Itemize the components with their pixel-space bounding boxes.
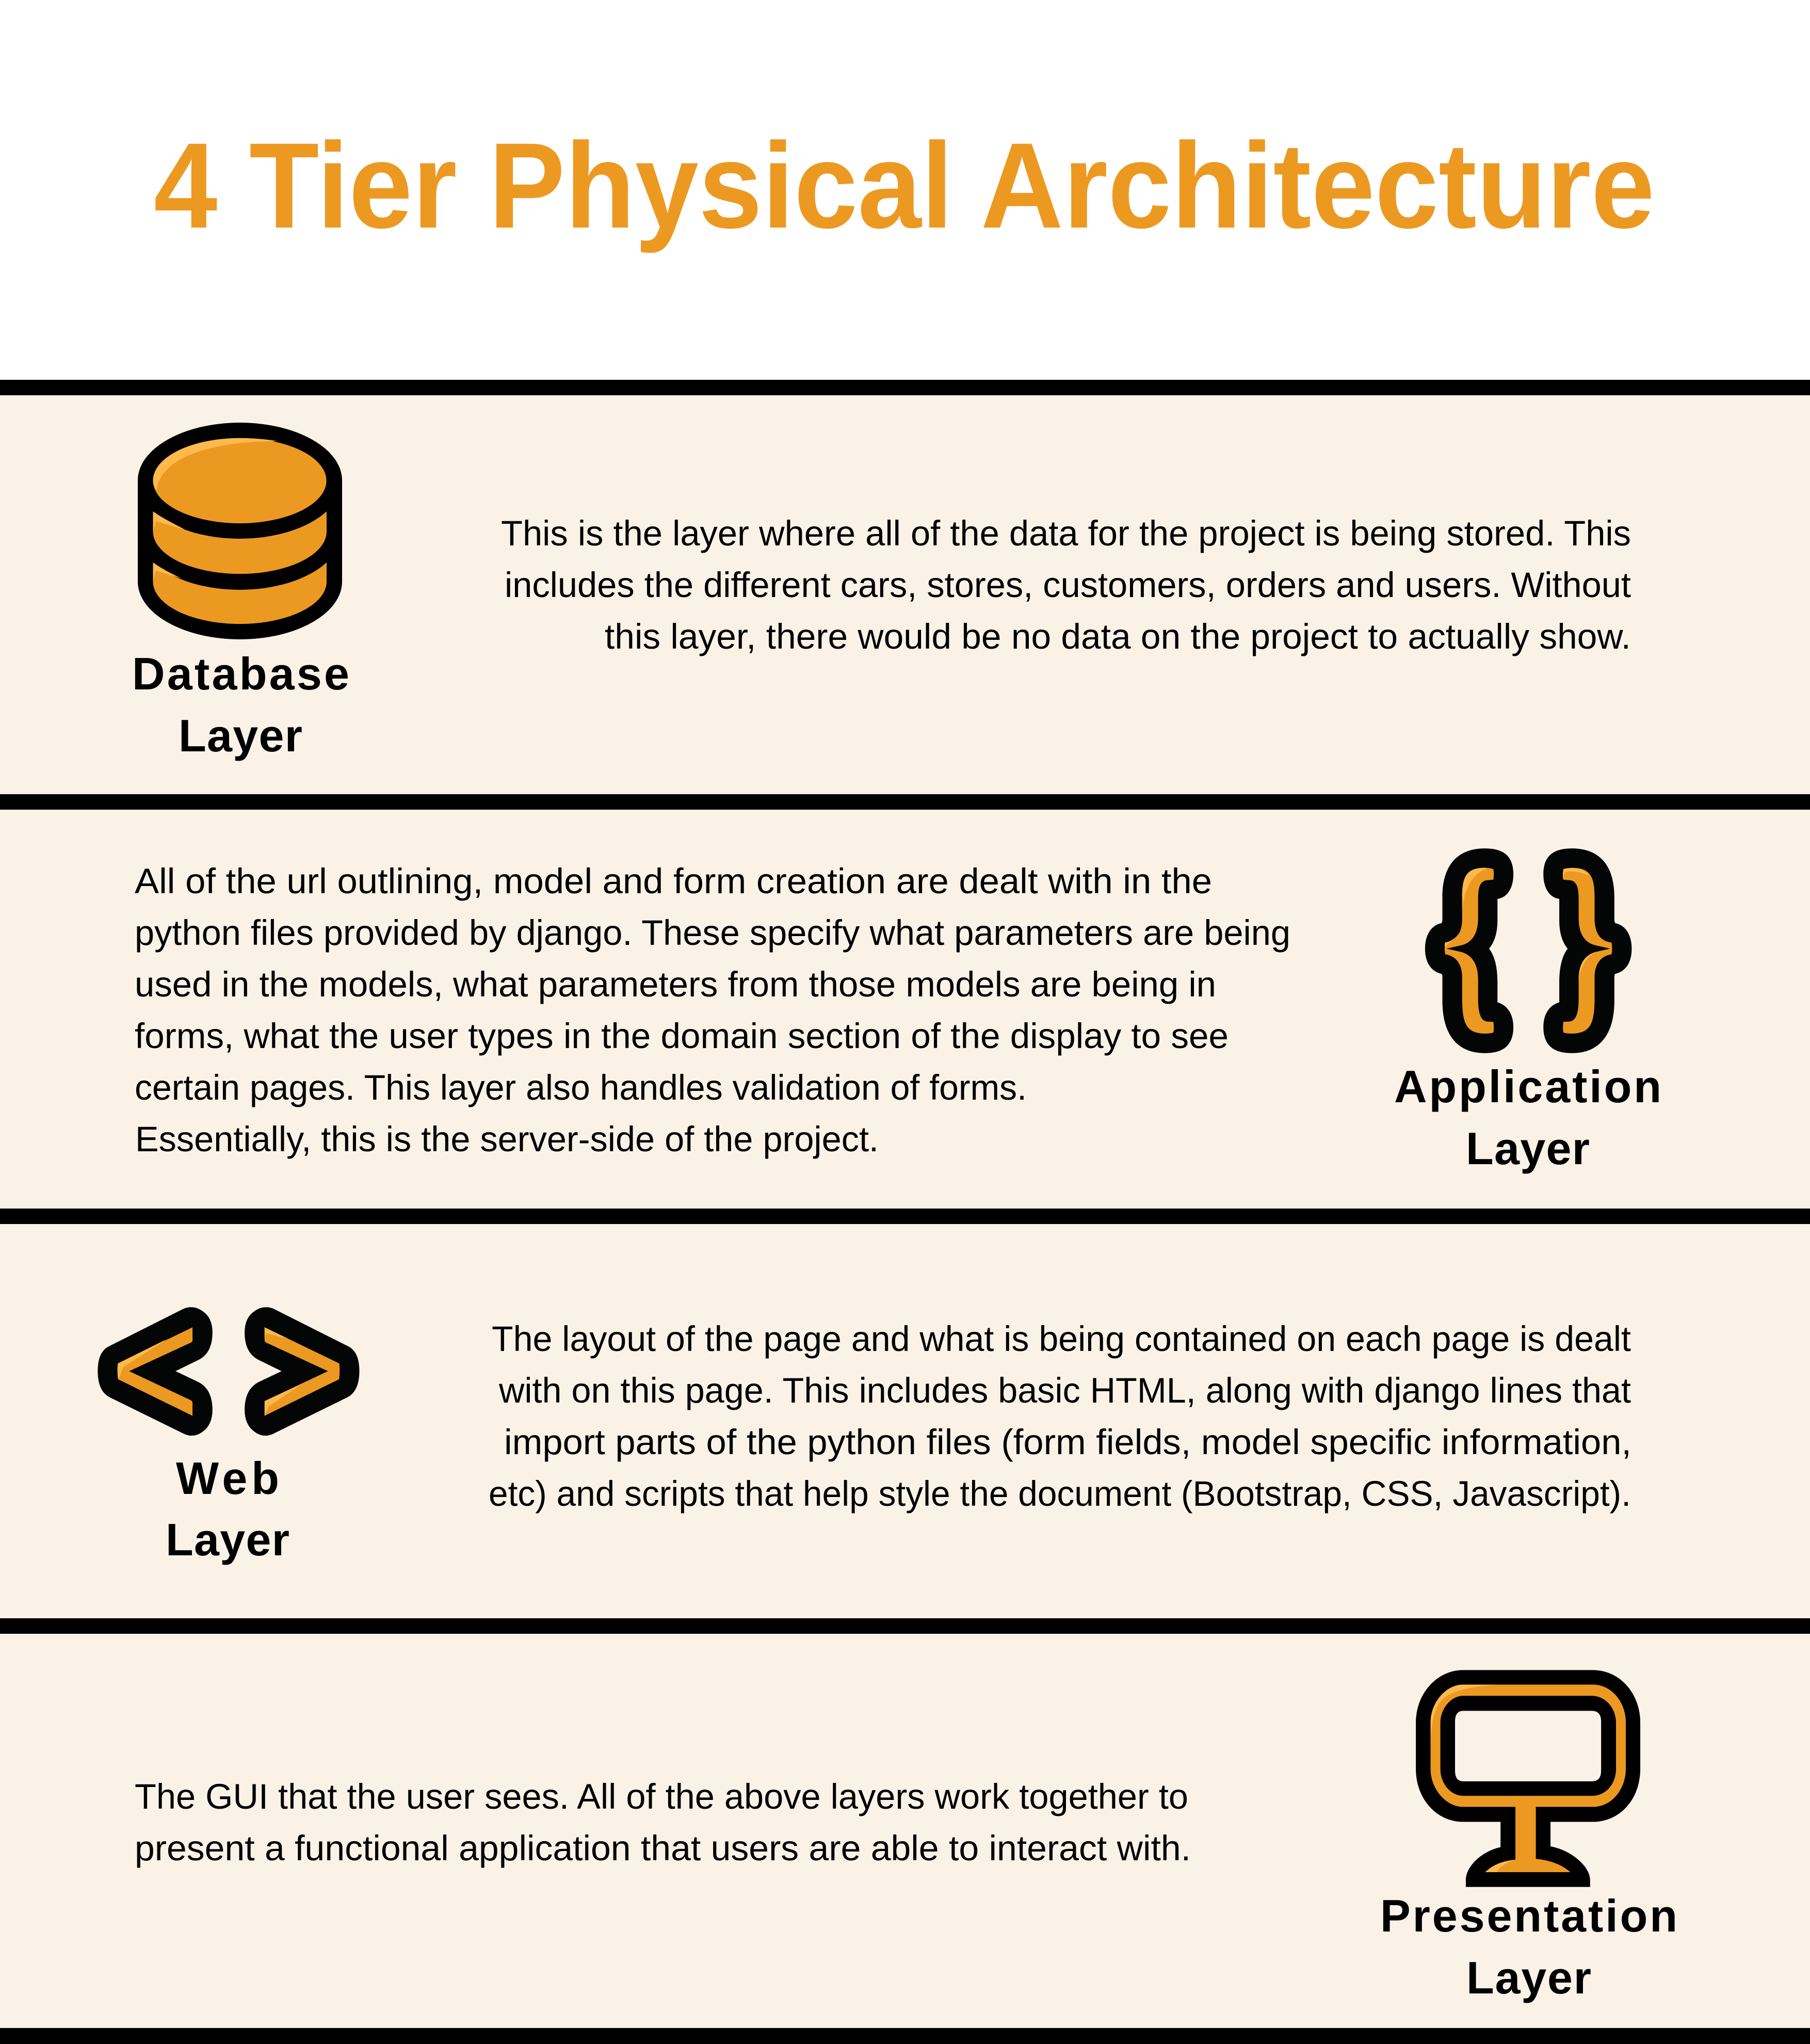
panel: database layer — [0, 395, 1810, 794]
text block: application description: used in the models, what parameters from those models are being in — [135, 964, 1216, 1004]
label: Presentation Layer: Presentation — [1380, 1890, 1677, 1941]
text block: application description — [135, 861, 1290, 1159]
title: 4 Tier Physical Architecture — [154, 118, 1655, 254]
label: Presentation Layer: Layer — [1466, 1952, 1591, 2003]
text block: database description: this layer, there would be no data on the project to actually show. — [605, 617, 1631, 656]
label: Web Layer: Layer — [166, 1514, 289, 1565]
text block: web description: import parts of the python files (form fields, model specific information, — [504, 1422, 1631, 1462]
label: Database Layer — [132, 648, 349, 761]
panel: application layer — [0, 810, 1810, 1209]
text block: web description — [489, 1319, 1631, 1514]
text block: application description: All of the url outlining, model and form creation are dealt with in the — [135, 861, 1212, 901]
label: Application Layer: Layer — [1466, 1123, 1590, 1174]
panel: web layer — [0, 1224, 1810, 1619]
text block: application description: certain pages. This layer also handles validation of forms. — [135, 1068, 1027, 1107]
label: Web Layer: Web — [176, 1453, 279, 1504]
text block: database description: includes the different cars, stores, customers, orders and users. Without — [505, 565, 1631, 605]
text block: presentation description: present a functional application that users are able to interact with. — [135, 1828, 1191, 1868]
icon: database — [138, 423, 342, 639]
text block: database description: This is the layer where all of the data for the project is being stored. This — [501, 513, 1631, 553]
label: Presentation Layer — [1380, 1890, 1677, 2003]
text block: application description: python files provided by django. These specify what parameters are being — [135, 913, 1290, 953]
text block: application description: Essentially, this is the server-side of the project. — [135, 1119, 879, 1159]
text block: web description: with on this page. This includes basic HTML, along with django lines that — [498, 1371, 1631, 1410]
text block: web description: etc) and scripts that help style the document (Bootstrap, CSS, Javascript). — [489, 1474, 1631, 1514]
text block: web description: The layout of the page and what is being contained on each page is dealt — [492, 1319, 1631, 1359]
text block: database description — [501, 513, 1631, 656]
label: Database Layer: Database — [132, 648, 349, 699]
icon: angle brackets — [98, 1307, 359, 1436]
text block: presentation description — [135, 1777, 1191, 1868]
text block: application description: forms, what the user types in the domain section of the display to see — [135, 1016, 1229, 1056]
label: Application Layer: Application — [1394, 1061, 1661, 1112]
label: Database Layer: Layer — [179, 710, 302, 761]
panel: presentation layer — [0, 1634, 1810, 2029]
icon: curly braces — [1425, 848, 1631, 1053]
text block: presentation description: The GUI that the user sees. All of the above layers work together to — [135, 1777, 1188, 1816]
icon: monitor — [1416, 1670, 1640, 1887]
label: Application Layer — [1394, 1061, 1661, 1174]
label: Web Layer — [166, 1453, 289, 1565]
